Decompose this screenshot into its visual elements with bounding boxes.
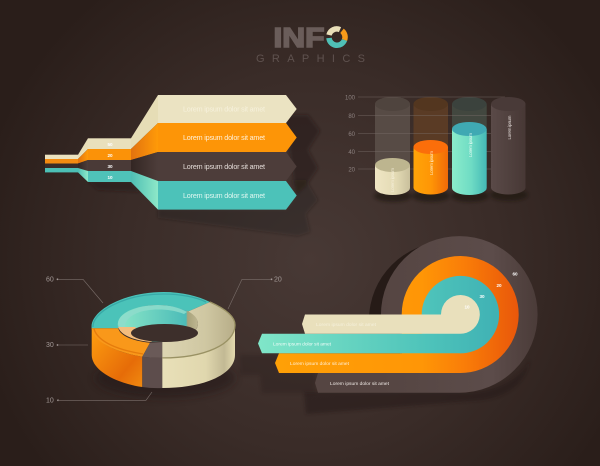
callout 30: 30 — [46, 342, 54, 349]
cylinder: cream: Lorem ipsum — [390, 168, 395, 192]
arrow: teal: Lorem ipsum dolor sit amet — [183, 191, 265, 200]
callout 20 — [228, 276, 282, 309]
subtitle GRAPHICS: GRAPHICS — [256, 53, 365, 65]
spiral band: teal — [258, 276, 499, 353]
callout 20: 20 — [274, 276, 282, 284]
axis labels: 100 — [345, 96, 356, 102]
arrow: cream — [158, 95, 297, 123]
spiral band: cream: 10 — [464, 304, 470, 310]
spiral band: cream: Lorem ipsum dolor sit amet — [316, 322, 377, 328]
donut top: orange segment — [92, 328, 150, 357]
funnel middle section: 30 — [107, 164, 113, 169]
funnel middle section — [88, 138, 131, 182]
arrow: brown: Lorem ipsum dolor sit amet — [183, 162, 265, 171]
funnel middle section: 20 — [107, 153, 113, 158]
funnel first transition — [78, 138, 88, 182]
panel: funnel chart — [45, 95, 320, 268]
panel: spiral chart — [240, 236, 538, 414]
callout 60: 60 — [46, 276, 54, 284]
cylinder shadows — [374, 189, 528, 202]
spiral band: orange — [275, 256, 519, 373]
arrow: teal — [158, 181, 297, 210]
callout 10: 10 — [46, 398, 54, 404]
title word INFO: INF — [274, 22, 324, 53]
funnel middle section: 10 — [107, 175, 113, 180]
title — [256, 22, 365, 65]
donut top: teal segment — [92, 292, 210, 328]
funnel shadows — [88, 115, 320, 268]
ghost cylinders — [375, 97, 487, 165]
cylinder: teal: Lorem ipsum — [468, 133, 473, 157]
cylinder: cream — [375, 158, 410, 195]
callout 10 — [46, 392, 152, 404]
icon: donut letter O — [329, 29, 345, 45]
cylinder: orange — [413, 140, 448, 194]
axis labels: 80 — [348, 114, 356, 120]
funnel second transition — [131, 95, 158, 210]
panel: cylinder bar chart — [345, 96, 528, 202]
donut top: brown segment — [142, 342, 162, 358]
donut lower-left peach rim — [118, 327, 152, 342]
axis labels — [345, 96, 356, 174]
donut rim highlight — [118, 305, 187, 328]
spiral band: brown — [315, 236, 538, 393]
axis labels: 20 — [348, 168, 356, 174]
donut side walls — [92, 325, 235, 388]
spiral band: brown: Lorem ipsum dolor sit amet — [330, 381, 390, 387]
spiral band: orange: Lorem ipsum dolor sit amet — [290, 361, 350, 367]
grid lines — [358, 97, 505, 169]
cylinder: teal — [452, 122, 487, 195]
arrow: orange — [158, 123, 297, 152]
spiral band: cream — [302, 295, 480, 334]
funnel left stems — [45, 155, 78, 172]
spiral band: teal: 30 — [479, 294, 485, 299]
spiral shadows — [302, 247, 521, 414]
donut bevel edges — [93, 294, 235, 358]
spiral band: teal: Lorem ipsum dolor sit amet — [273, 342, 332, 348]
axis labels: 40 — [348, 150, 356, 156]
callout 30 — [46, 342, 88, 349]
panel: donut chart — [46, 276, 282, 404]
donut shadow — [95, 358, 235, 398]
axis labels: 60 — [348, 132, 356, 138]
spiral band: orange: 20 — [496, 283, 502, 288]
arrow: orange: Lorem ipsum dolor sit amet — [183, 133, 265, 142]
donut inner wall — [118, 305, 198, 342]
arrow: brown — [158, 152, 297, 181]
donut hole — [131, 324, 198, 342]
cylinder: brown — [491, 97, 526, 194]
cylinder: brown: Lorem ipsum — [507, 115, 512, 140]
arrow: cream: Lorem ipsum dolor sit amet — [183, 104, 265, 114]
donut top: cream segment — [162, 302, 235, 358]
funnel middle section: 50 — [107, 142, 113, 147]
spiral band: brown: 60 — [512, 272, 518, 276]
callout 60 — [46, 276, 103, 303]
cylinder: orange: Lorem ipsum — [429, 151, 434, 175]
